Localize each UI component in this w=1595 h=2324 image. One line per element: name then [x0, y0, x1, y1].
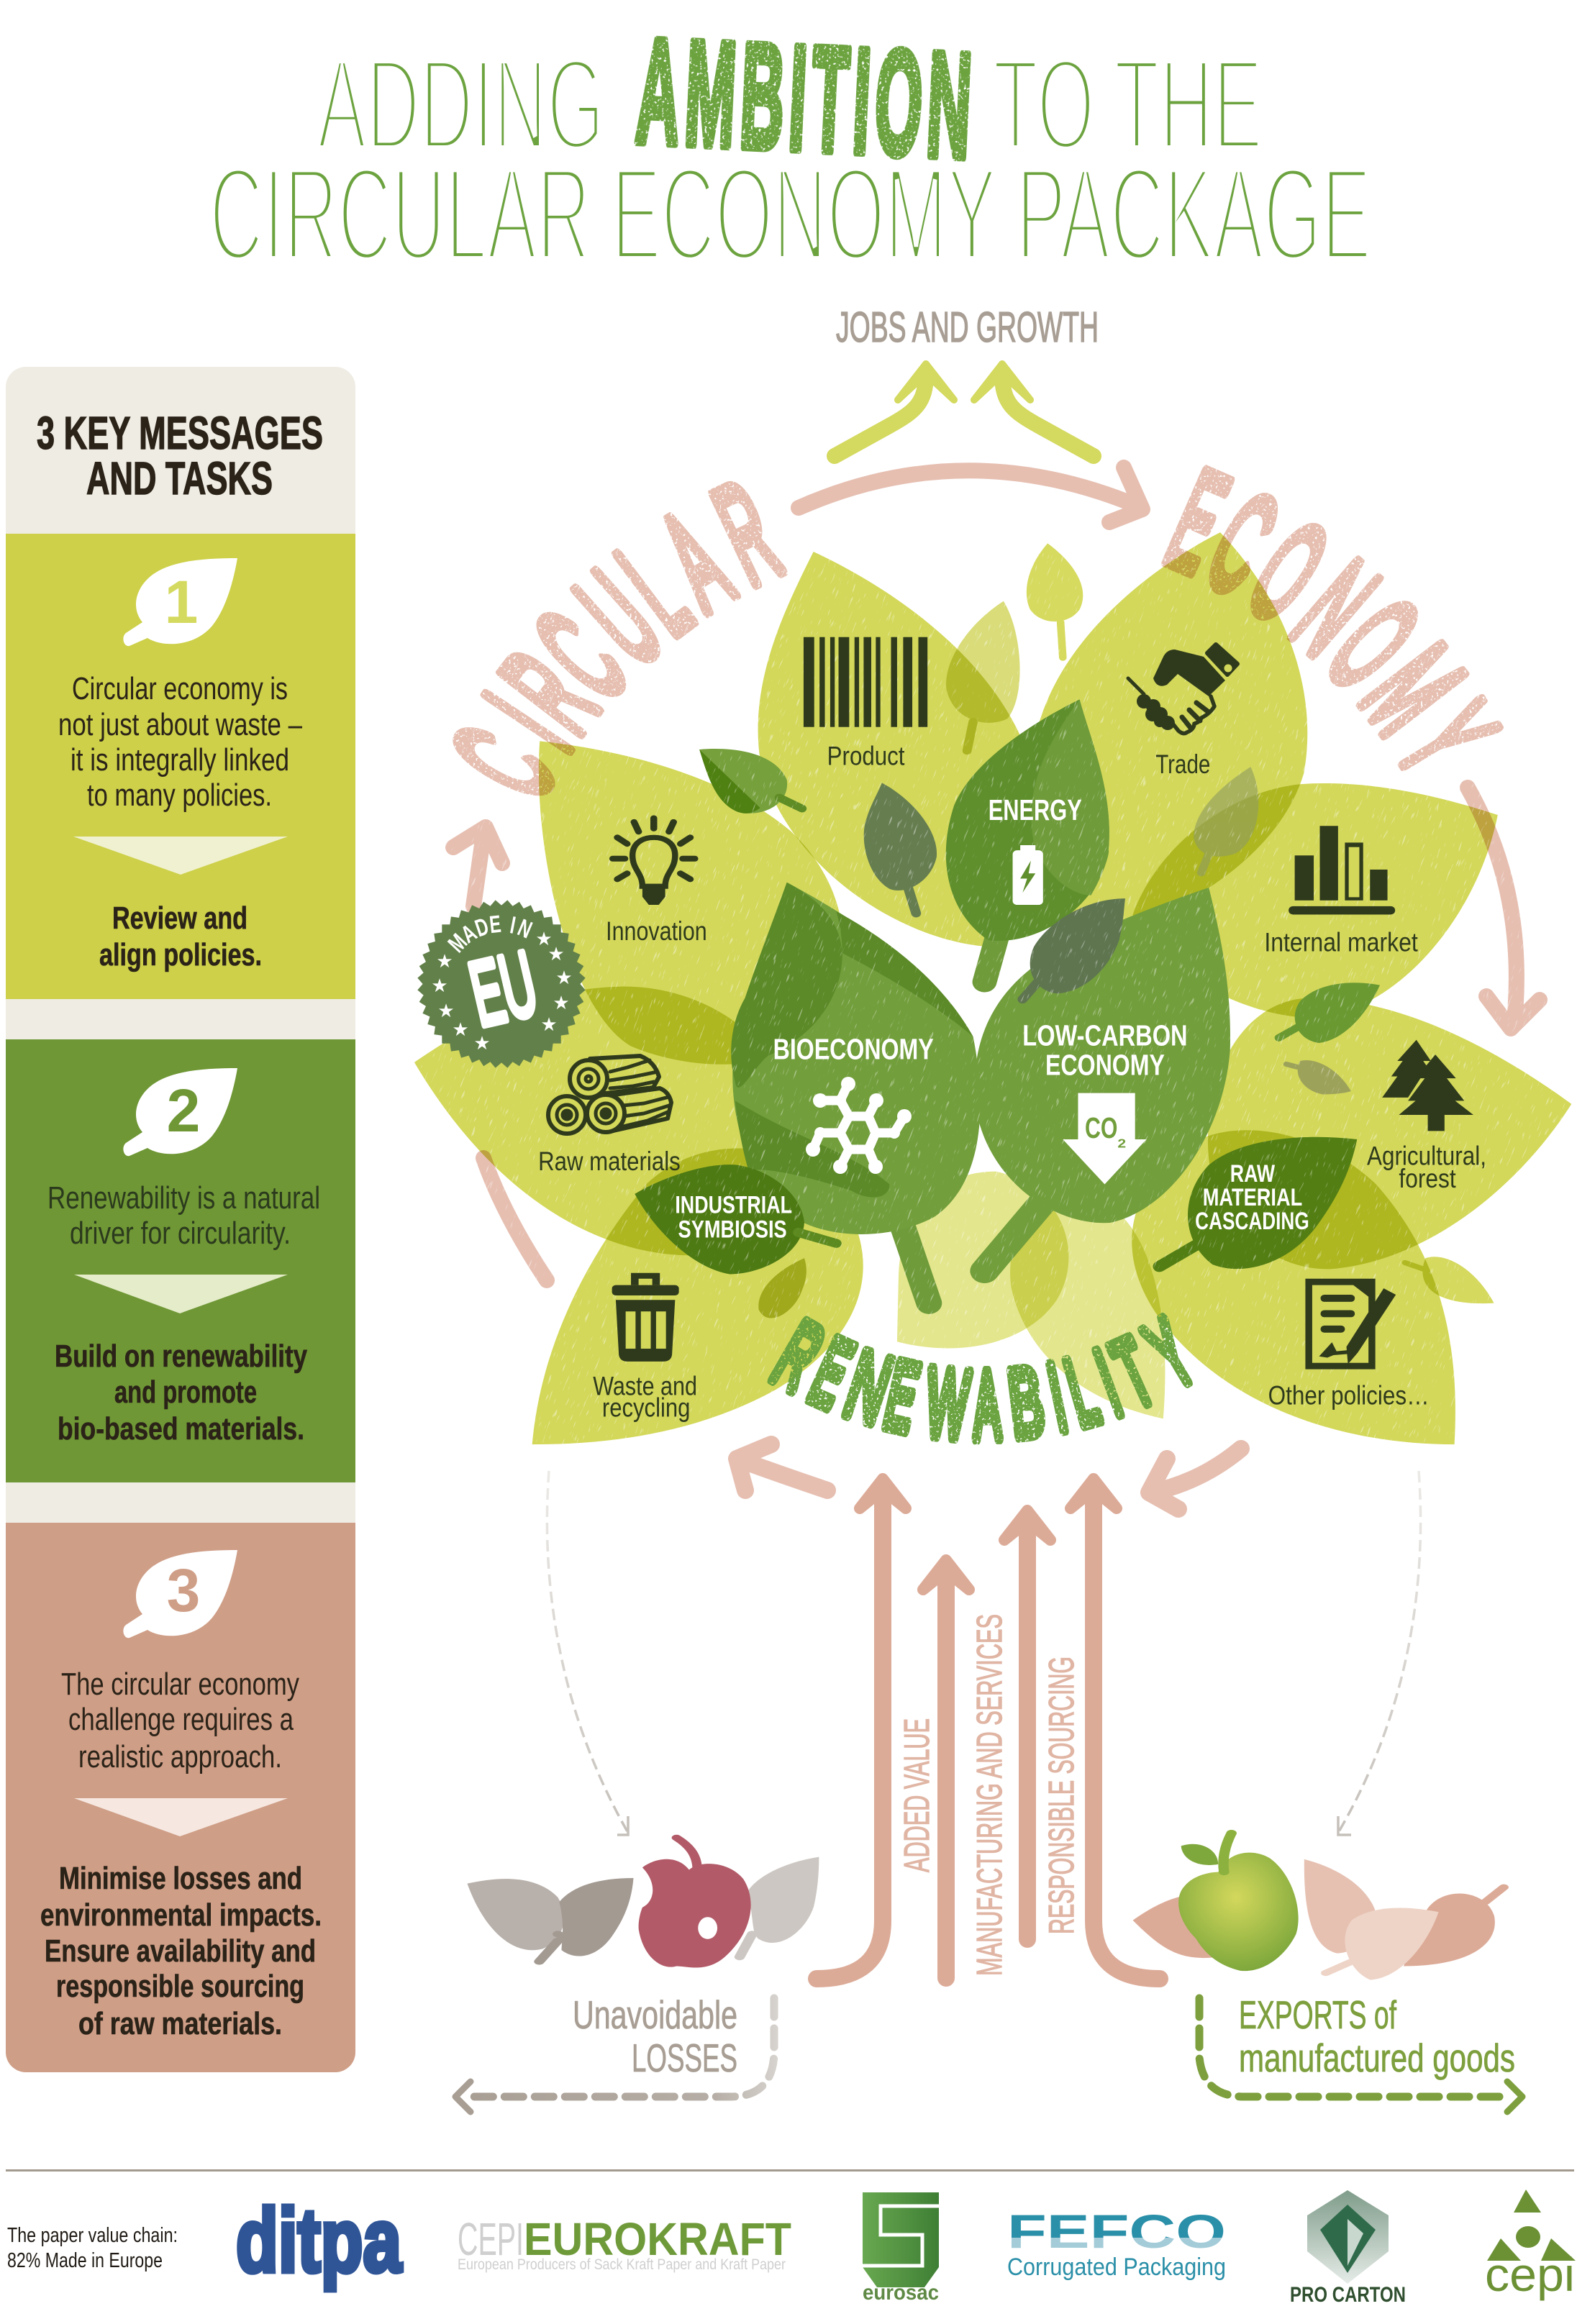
arrow: exports dashed out: [1199, 1998, 1522, 2112]
title line 1 right: TO THE: [993, 32, 1263, 177]
message 1 text: Circular economy is: [72, 671, 288, 706]
message 3: [6, 1523, 355, 2072]
leaf: trade: [1027, 532, 1307, 940]
task 2: Build on renewability: [55, 1339, 307, 1374]
logo: cepi eurokraft: CEPI: [458, 2213, 524, 2265]
logo: ditpa: ditpa: [236, 2191, 402, 2291]
label: agricultural forest: [1367, 1141, 1486, 1193]
leaf: internal market: [1133, 783, 1498, 1018]
leaf: small right dark: [1278, 983, 1380, 1043]
arrow: losses dashed out: [455, 1998, 774, 2112]
label: raw materials: Raw materials: [538, 1146, 681, 1176]
heading: ECONOMY on arc: O: [1301, 573, 1446, 715]
footer note: 82% Made in Europe: [7, 2249, 163, 2272]
title: AMBITION: [633, 7, 980, 189]
heading: CIRCULAR on arc: R: [694, 452, 799, 614]
leaf: small right bottom: [1405, 1257, 1494, 1303]
leaf: raw material cascading: [1160, 1137, 1357, 1269]
heading: ECONOMY on arc: C: [1186, 464, 1299, 622]
leaf: small top yellow: [1027, 543, 1083, 657]
label: raw material cascading: RAW: [1230, 1159, 1276, 1187]
badge text: made in: I: [508, 911, 518, 939]
badge stars: ★: [436, 950, 453, 972]
badge stars: ★: [437, 1000, 455, 1021]
leaf: waste and recycling: [532, 1149, 863, 1444]
label: raw material cascading: CASCADING: [1195, 1207, 1309, 1234]
heading: RENEWABILITY on arc: N: [835, 1331, 902, 1444]
heading: CIRCULAR on arc: [424, 452, 799, 819]
logo: fefco: FEFCO: [1007, 2205, 1226, 2258]
badge stars: ★: [540, 1013, 558, 1035]
label: unavoidable losses: Unavoidable: [573, 1992, 737, 2037]
arrows: return to renewability: [737, 1444, 1241, 1509]
arrow: dashed to losses: [547, 1471, 628, 1835]
heading: CIRCULAR on arc: L: [594, 516, 714, 662]
label: low carbon economy: LOW-CARBON: [1022, 1019, 1188, 1052]
message 2 text: Renewability is a natural: [47, 1180, 320, 1216]
label: innovation: Innovation: [606, 916, 707, 946]
message 3 text: [61, 1667, 299, 1774]
arrow down: [74, 1275, 288, 1313]
footer rule: [6, 2169, 1574, 2172]
label: industrial symbiosis: SYMBIOSIS: [678, 1216, 787, 1243]
task 3: Ensure availability and: [45, 1933, 316, 1969]
logo: cepi eurokraft: European Producers of Sack Kraft Paper and Kraft Paper: [458, 2256, 786, 2273]
arrow: manufacturing and services: [923, 1560, 969, 1978]
badge stars: [431, 928, 573, 1054]
badge text: made in: N: [514, 914, 536, 944]
badge text: made in: [443, 911, 536, 958]
badge stars: ★: [431, 975, 448, 996]
heading: RENEWABILITY on arc: [758, 1300, 1210, 1459]
arrows: circular loop: [453, 468, 1540, 1280]
heading: RENEWABILITY on arc: R: [758, 1302, 839, 1410]
icon: recycling bin: [612, 1273, 679, 1362]
icon: document and pen: [1305, 1279, 1396, 1370]
footer note: [7, 2224, 178, 2272]
leaf: industrial symbiosis: [635, 1165, 836, 1274]
heading: CIRCULAR on arc: I: [457, 672, 598, 773]
label: unavoidable losses: LOSSES: [632, 2036, 737, 2080]
task 2: bio-based materials.: [58, 1411, 304, 1446]
heading: ECONOMY on arc: N: [1268, 534, 1403, 681]
badge: made in EU: [417, 900, 586, 1068]
arrow down: [73, 837, 288, 875]
heading: RENEWABILITY on arc: A: [973, 1352, 1001, 1459]
task 3: Minimise losses and: [59, 1861, 302, 1896]
logo: eurosac: eurosac: [863, 2281, 939, 2305]
icon: leaf number 3: 3: [167, 1557, 200, 1624]
message 3 text: The circular economy: [61, 1667, 299, 1702]
label: internal market: Internal market: [1264, 927, 1418, 957]
arrows: value chain vertical: [817, 1479, 1160, 1979]
leaf: bioeconomy: [731, 883, 980, 1303]
heading: ECONOMY on arc: [1149, 441, 1524, 798]
heading: RENEWABILITY on arc: B: [1004, 1349, 1049, 1457]
message 1 text: not just about waste –: [58, 707, 302, 742]
arrow: exports: [1071, 1479, 1160, 1979]
heading: ECONOMY on arc: O: [1225, 493, 1352, 650]
leaf: small right olive: [1286, 1060, 1351, 1094]
logo: fefco: [1007, 2205, 1226, 2281]
label: manufacturing and services: MANUFACTURING AND SERVICES: [971, 1614, 1009, 1976]
leaf: pale centre right: [1010, 1197, 1165, 1418]
leaf: low carbon economy: [975, 888, 1230, 1271]
heading: ECONOMY on arc: E: [1149, 441, 1247, 601]
icon: CO2 down arrow: 2: [1117, 1136, 1126, 1151]
leaf: pale centre left: [897, 1172, 1068, 1348]
icon: battery: [1013, 845, 1043, 905]
panel heading: [37, 407, 323, 504]
leaf text and white labels: [538, 741, 1486, 1423]
leaf: olive below industrial: [758, 1258, 806, 1318]
logo: cepi eurokraft: EUROKRAFT: [524, 2213, 791, 2265]
leaf: raw materials: [414, 986, 809, 1255]
heading: CIRCULAR on arc: C: [508, 586, 653, 724]
badge text: made in: D: [472, 913, 492, 942]
label: agricultural forest: forest: [1399, 1163, 1456, 1193]
heading: RENEWABILITY on arc: I: [1084, 1331, 1132, 1435]
label: product: Product: [827, 741, 905, 771]
arrow: dashed to exports: [1338, 1471, 1421, 1835]
badge stars: ★: [473, 1032, 491, 1054]
logo: cepi: [1485, 2189, 1576, 2301]
heading: RENEWABILITY on arc: L: [1056, 1336, 1108, 1446]
label: unavoidable losses: [573, 1992, 737, 2080]
task 3: of raw materials.: [78, 2006, 282, 2041]
label: low carbon economy: [1022, 1019, 1188, 1082]
arrow down: [74, 1798, 288, 1836]
logo: fefco: Corrugated Packaging: [1007, 2254, 1226, 2281]
icon: barcode: [804, 637, 927, 727]
task 3: [40, 1861, 322, 2041]
title: [209, 7, 1371, 288]
icon: handshake: [1128, 644, 1237, 734]
task 3: responsible sourcing: [56, 1969, 304, 2004]
icon: leaf number 3: [123, 1550, 237, 1638]
icon: logs: [548, 1056, 671, 1134]
badge text: made in: E: [488, 911, 502, 939]
task 1: [99, 901, 262, 972]
label: waste and recycling: recycling: [602, 1393, 690, 1423]
illustration: losses fruit and leaves: [468, 1838, 819, 1968]
arrows: jobs and growth: [835, 364, 1094, 456]
message 3 text: realistic approach.: [78, 1739, 282, 1774]
leaf: grey green: [864, 783, 937, 913]
label: raw material cascading: MATERIAL: [1203, 1183, 1302, 1211]
title line 1 left: ADDING: [317, 32, 604, 177]
label: waste and recycling: [593, 1371, 697, 1423]
illustration: exports fruit and leaves: [1133, 1833, 1504, 1980]
badge text: made in: A: [456, 919, 481, 949]
task 2: [55, 1339, 307, 1446]
heading: CIRCULAR on arc: A: [637, 483, 753, 638]
logo: cepi: cepi: [1485, 2248, 1575, 2301]
arrow: responsible sourcing: [1004, 1510, 1050, 1939]
label: trade: Trade: [1155, 749, 1210, 779]
leaf: pale grey right: [1194, 767, 1258, 872]
badge text: EU: EU: [461, 933, 545, 1046]
label: other policies: Other policies…: [1268, 1380, 1430, 1411]
badge stars: ★: [452, 1019, 469, 1040]
label: exports of manufactured goods: [1239, 1992, 1515, 2080]
logo: pro carton: PRO CARTON: [1290, 2283, 1406, 2307]
label: industrial symbiosis: INDUSTRIAL: [675, 1191, 792, 1218]
label: responsible sourcing: RESPONSIBLE SOURCING: [1042, 1657, 1081, 1934]
label: exports of manufactured goods: manufactured goods: [1239, 2036, 1515, 2080]
heading: ECONOMY on arc: Y: [1368, 682, 1524, 798]
message 2: [6, 1039, 355, 1482]
label: low carbon economy: ECONOMY: [1045, 1048, 1165, 1082]
message 1: [6, 534, 355, 999]
leaf: innovation: [539, 741, 843, 1065]
panel: key messages: [6, 367, 355, 2072]
label: industrial symbiosis: [675, 1191, 792, 1243]
leaf: small dark green: [699, 749, 802, 814]
label: energy: ENERGY: [989, 793, 1082, 826]
task 1: Review and: [112, 901, 247, 936]
icon: CO2 down arrow: [1063, 1093, 1147, 1184]
badge text: made in: M: [443, 929, 473, 958]
heading: RENEWABILITY on arc: E: [877, 1341, 927, 1452]
badge stars: ★: [555, 967, 573, 988]
label: raw material cascading: [1195, 1159, 1309, 1234]
icon: lightbulb: [613, 819, 695, 904]
arrow: added value: [817, 1479, 906, 1979]
task 3: environmental impacts.: [40, 1897, 322, 1933]
icon: bar chart: [1289, 826, 1395, 914]
heading: RENEWABILITY on arc: W: [922, 1349, 973, 1458]
message 1 text: it is integrally linked: [71, 742, 289, 778]
logo: cepi eurokraft: [458, 2213, 791, 2273]
panel heading: AND TASKS: [86, 452, 273, 504]
task 2: and promote: [114, 1375, 257, 1410]
icon: CO2 down arrow: CO: [1085, 1111, 1117, 1144]
footer note: The paper value chain:: [7, 2224, 178, 2247]
message 2 text: [47, 1180, 320, 1251]
icon: fir trees: [1382, 1040, 1473, 1131]
message 1 text: [58, 671, 302, 813]
heading: CIRCULAR on arc: C: [424, 706, 583, 819]
label: waste and recycling: Waste and: [593, 1371, 697, 1401]
logo: pro carton: [1290, 2190, 1406, 2307]
message 2 text: driver for circularity.: [70, 1216, 291, 1251]
icon: leaf number 2: [123, 1068, 237, 1156]
heading: RENEWABILITY on arc: I: [1040, 1344, 1074, 1451]
heading: CIRCULAR on arc: R: [473, 628, 624, 757]
label: exports of manufactured goods: EXPORTS of: [1239, 1992, 1396, 2037]
leaf: product: [758, 552, 1042, 947]
badge stars: ★: [535, 928, 553, 949]
heading: CIRCULAR on arc: U: [550, 544, 686, 691]
heading: RENEWABILITY on arc: Y: [1130, 1300, 1210, 1406]
label: bioeconomy: BIOECONOMY: [773, 1032, 934, 1065]
icon: leaf number 1: 1: [165, 568, 198, 636]
jobs and growth label: JOBS AND GROWTH: [836, 304, 1099, 351]
leaf icons: [612, 637, 1473, 1370]
leaf: small beside product: [946, 601, 1020, 751]
badge stars: ★: [547, 943, 565, 965]
panel heading: 3 KEY MESSAGES: [37, 407, 323, 459]
leaf: agricultural forest: [1208, 998, 1571, 1269]
label: agricultural forest: Agricultural,: [1367, 1141, 1486, 1171]
leaf cluster: [414, 532, 1571, 1444]
icon: leaf number 1: [123, 558, 237, 646]
leaf: energy: [946, 699, 1109, 982]
task 1: align policies.: [99, 937, 262, 972]
heading: RENEWABILITY on arc: T: [1099, 1318, 1167, 1426]
leaf: grey centre: [1022, 898, 1125, 999]
message 3 text: challenge requires a: [68, 1702, 294, 1737]
label: added value: ADDED VALUE: [898, 1718, 937, 1872]
logo: eurosac: [863, 2192, 939, 2305]
icon: leaf number 2: 2: [167, 1077, 200, 1144]
heading: RENEWABILITY on arc: E: [797, 1319, 866, 1427]
icon: molecule: [806, 1077, 912, 1174]
message 1 text: to many policies.: [87, 778, 272, 813]
heading: ECONOMY on arc: M: [1334, 621, 1491, 759]
badge stars: ★: [553, 992, 570, 1013]
leaf: other policies: [1132, 1130, 1455, 1444]
